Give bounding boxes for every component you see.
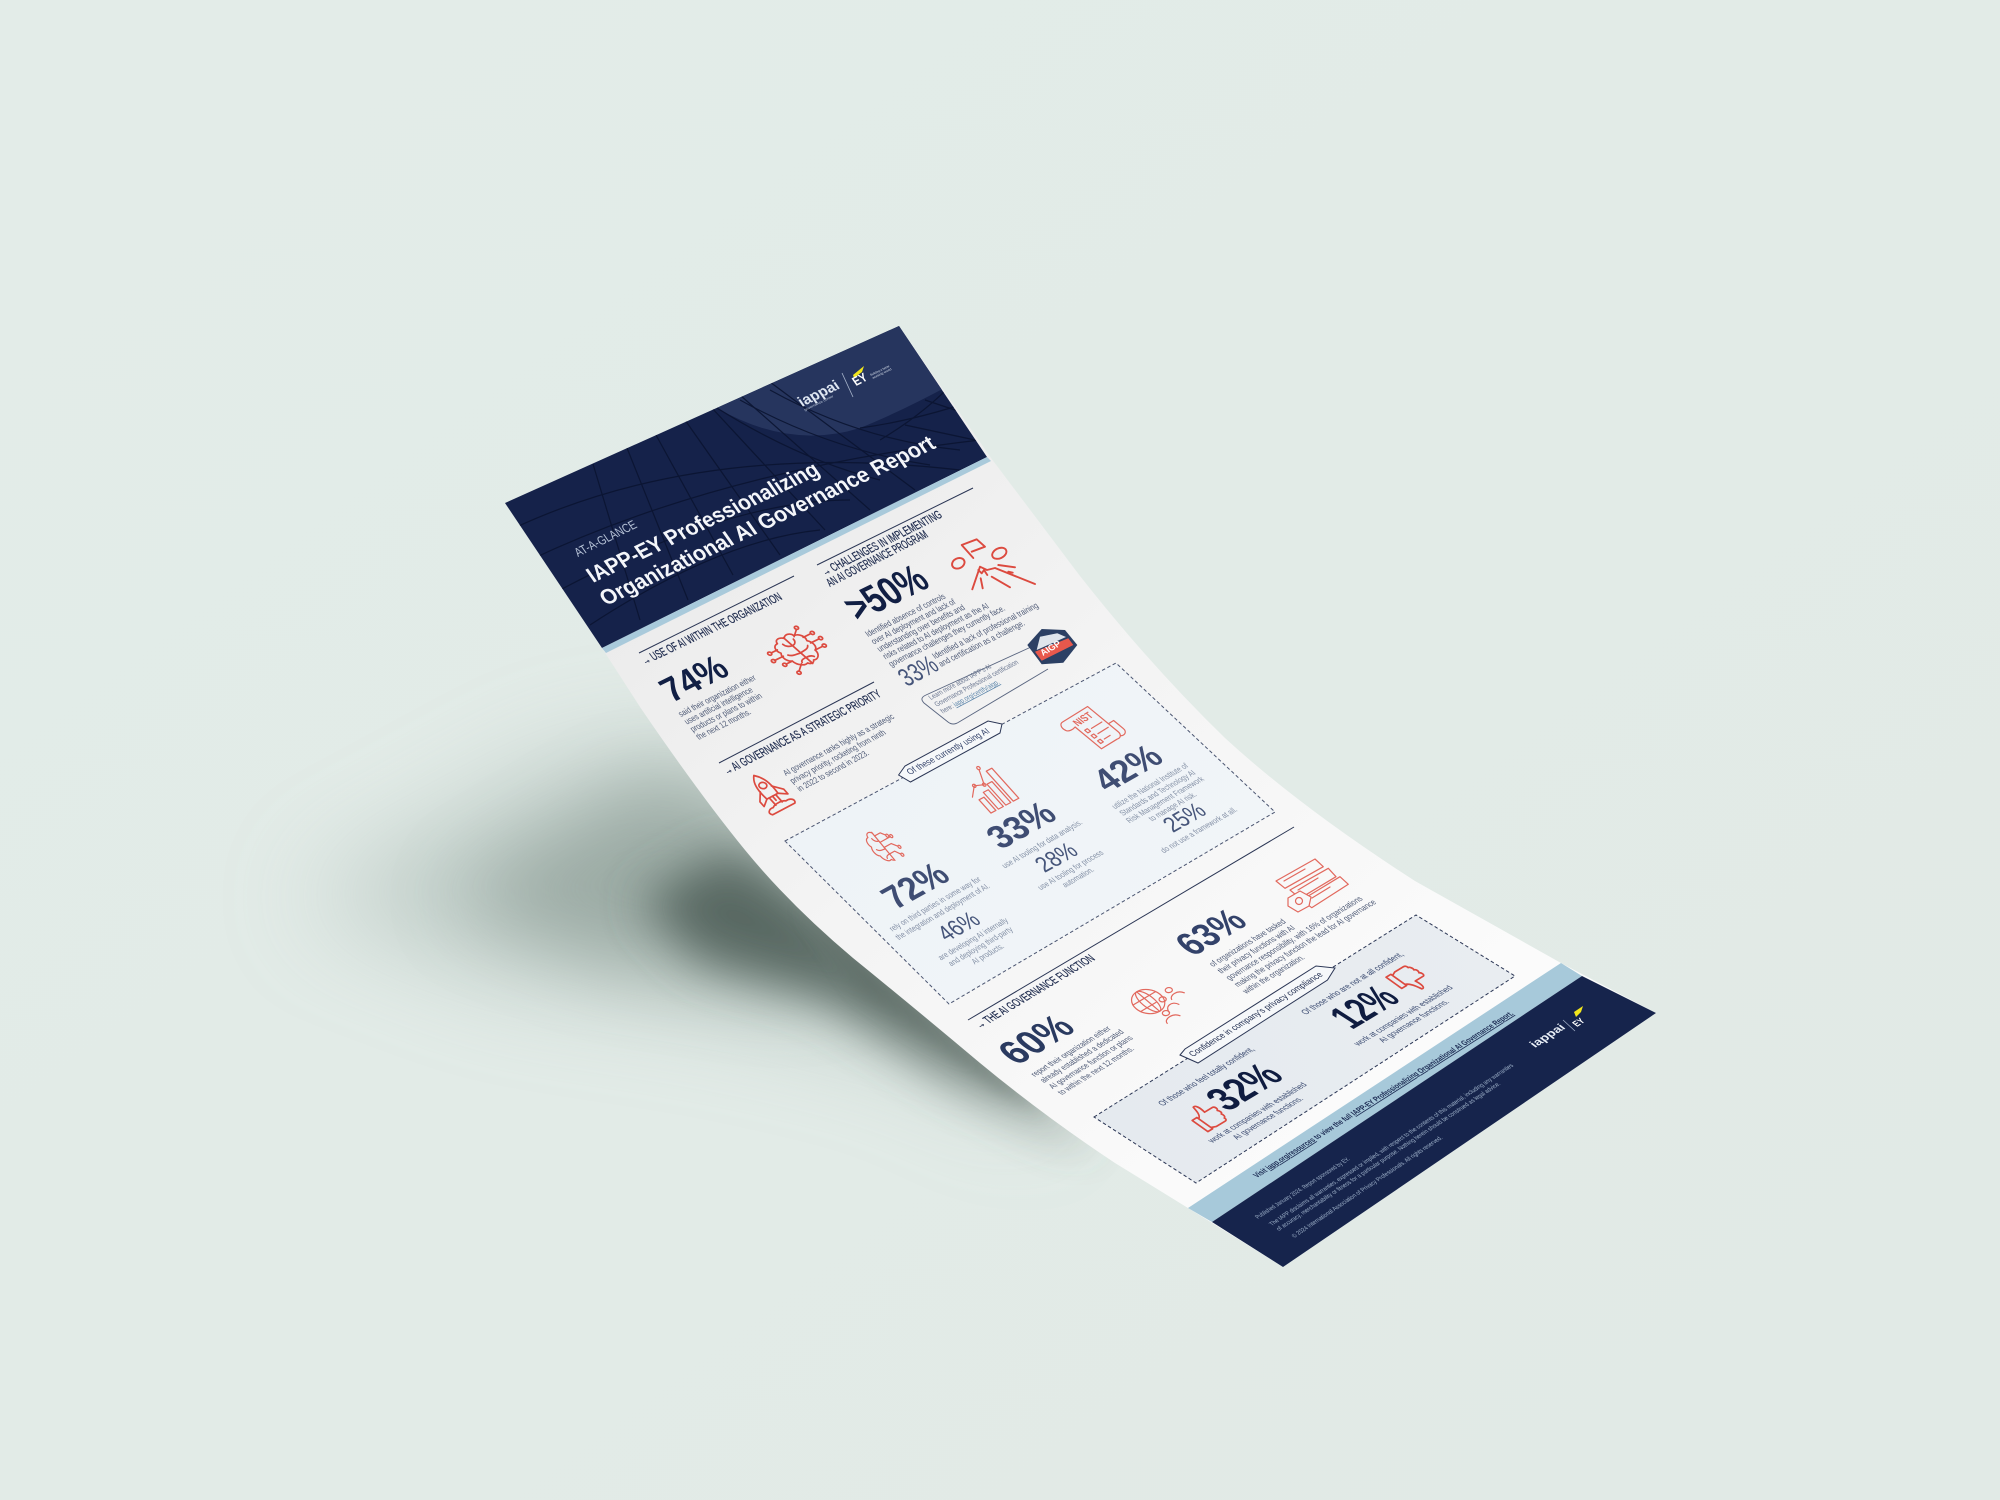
text: legal notes: of accuracy, merchantability or fitness for a particular purpose. Nothing herein should be construed as legal advice. [1275, 1081, 1503, 1232]
heading: challenges: → CHALLENGES IN IMPLEMENTING [818, 508, 945, 578]
text: >50% description: over AI deployment and lack of [869, 597, 958, 646]
header logo: iapp ai: iappai [795, 377, 843, 410]
label: of these currently using AI: Of these currently using AI [904, 727, 992, 777]
icon: globe and people [1125, 976, 1198, 1028]
text: >50% description: risks related to AI deployment as the AI [881, 601, 991, 661]
panel: confidence in privacy compliance [1094, 915, 1515, 1183]
text: no framework: do not use a framework at all. [1158, 805, 1240, 855]
footer logos: EY [1571, 1017, 1588, 1029]
heading: strategic priority: → AI GOVERNANCE AS A STRATEGIC PRIORITY [720, 687, 884, 777]
header banner [505, 300, 1000, 648]
callout: AIGP certification: Learn more about IAPP's AI [927, 663, 994, 702]
text: 63% description: making the privacy function the lead for AI governance [1232, 898, 1379, 989]
text: 63% description: within the organization. [1239, 953, 1307, 996]
heading: challenges: AN AI GOVERNANCE PROGRAM [823, 528, 931, 589]
text: 42% description: to manage AI risk. [1146, 790, 1199, 823]
text: 72% description: rely on third parties in some way for [887, 875, 983, 933]
stat: 63%: 63% [1167, 902, 1256, 963]
text: 60% description: already established a dedicated [1037, 1028, 1126, 1084]
icon: thumbs down [1386, 964, 1434, 995]
text: 60% description: AI governance function or plans [1046, 1034, 1135, 1090]
icon: AIGP badge: AIGP [1038, 639, 1063, 658]
text: 74% description: uses artificial intelligence [682, 685, 755, 726]
text: data analysis: use AI tooling for data analysis. [999, 818, 1085, 870]
stat: 46%: 46% [931, 907, 986, 946]
panel: AI governance as a strategic priority [719, 682, 910, 815]
text: 12% description: AI governance functions. [1375, 998, 1452, 1044]
footer panel [1212, 976, 1656, 1267]
header logo: EY: EY [849, 370, 871, 388]
text: >50% description: Identified absence of controls [863, 592, 948, 639]
mockup scene [324, 326, 1656, 1267]
stat: >50%: >50% [835, 556, 937, 629]
stat: 12%: 12% [1319, 979, 1410, 1035]
text: 63% description: of organizations have tasked [1207, 917, 1288, 968]
panel: use of AI [638, 576, 841, 742]
icon: mountain with flag [950, 539, 1035, 589]
header logo: EY: working world [871, 367, 893, 380]
text: 33% description: and certification as a challenge. [936, 619, 1027, 669]
text: legal notes: Published January 2024. Report sponsored by EY. [1254, 1157, 1352, 1220]
stat: 42%: 42% [1084, 738, 1171, 799]
heading: challenges [818, 508, 945, 589]
callout: AIGP certification: here: [939, 703, 957, 715]
footer logos: iappai [1526, 1021, 1568, 1050]
text: 42% description: Risk Management Framework [1124, 775, 1207, 825]
text: 32% description: AI governance functions. [1229, 1095, 1306, 1141]
title: IAPP-EY Professionalizing [582, 457, 824, 587]
panel: of those currently using AI [785, 663, 1275, 1004]
text: 63% description: their privacy functions with AI [1215, 924, 1298, 975]
text: strategic priority description: privacy priority, rocketing from ninth [788, 728, 888, 786]
icon: rocket [742, 769, 796, 815]
stat: 33%: 33% [892, 650, 944, 692]
text: 46% description: AI products. [969, 942, 1006, 966]
text: legal notes: © 2024 International Association of Privacy Professionals. All rights reserved. [1290, 1134, 1445, 1239]
text: >50% description: governance challenges they currently face. [887, 604, 1007, 669]
stat: 72%: 72% [873, 856, 958, 916]
text: 46% description: and deploying third-party [946, 925, 1015, 968]
panel: the AI governance function [968, 827, 1387, 1096]
header logo: EY: Building a better [869, 364, 891, 377]
stat: 60%: 60% [988, 1007, 1084, 1071]
stat: 74%: 74% [652, 648, 736, 709]
text: 32% description: work at companies with established [1204, 1081, 1310, 1144]
paper shadow [300, 740, 1100, 1150]
text: strategic priority description: AI governance ranks highly as a strategic [781, 712, 896, 778]
heading: AI governance function: → THE AI GOVERNANCE FUNCTION [972, 952, 1098, 1031]
heading: use of AI: → USE OF AI WITHIN THE ORGANIZATION [638, 590, 785, 667]
stat: 28%: 28% [1029, 838, 1084, 877]
header logo: iapp ai: governance center [803, 394, 835, 412]
text: totally confident: Of those who feel totally confident, [1155, 1045, 1257, 1107]
header logo divider [842, 373, 853, 397]
text: process automation: use AI tooling for process [1035, 848, 1106, 892]
stat: 33%: 33% [978, 795, 1064, 856]
paper sheet [505, 326, 1656, 1267]
footer call to action band: Visit iapp.org/resources to view the full IAPP-EY Professionalizing Organizational AI Governance Report. [1251, 1009, 1516, 1179]
text: 63% description: governance responsibility, with 16% of organizations [1224, 894, 1365, 982]
text: legal notes: The IAPP disclaims all warranties, expressed or implied, with respect to the contents of this material, including any warranties [1268, 1063, 1516, 1227]
eyebrow: at-a-glance: AT-A-GLANCE [571, 517, 640, 559]
icon: NIST scroll: NIST [1071, 711, 1097, 729]
title: Organizational AI Governance Report [595, 431, 940, 610]
text: >50% description: understanding over benefits and [875, 603, 967, 654]
label: confidence in privacy compliance: Confidence in company's privacy compliance [1187, 971, 1326, 1059]
icon: thumbs up [1182, 1100, 1230, 1132]
text: 60% description: to within the next 12 months. [1055, 1045, 1137, 1096]
stat: 25%: 25% [1157, 798, 1212, 837]
text: 42% description: Standards and Technology AI [1117, 768, 1198, 817]
text: 60% description: report their organization either [1028, 1025, 1114, 1078]
icon: brain circuit [861, 824, 908, 866]
footer call to action band [1188, 963, 1582, 1222]
text: 74% description: the next 12 months. [694, 707, 753, 742]
header logo: EY [849, 364, 893, 388]
panel: challenges [817, 488, 1077, 724]
icon: settings and badge [1276, 859, 1348, 912]
icon: NIST scroll [1058, 703, 1128, 754]
text: strategic priority description: in 2022 to second in 2023. [795, 748, 871, 793]
text: 46% description: are developing AI internally [936, 916, 1011, 962]
stat: 32%: 32% [1195, 1056, 1294, 1117]
text: process automation: automation. [1060, 865, 1096, 889]
text: 12% description: work at companies with established [1350, 984, 1456, 1047]
text: not at all confident: Of those who are not at all confident, [1298, 950, 1406, 1016]
icon: AIGP badge [1027, 629, 1077, 664]
callout: AIGP certification [922, 647, 1048, 724]
text: 74% description: products or plans to within [688, 691, 764, 734]
text: 74% description: said their organization either [676, 673, 758, 719]
callout: AIGP certification: iapp.org/certify/aigp. [952, 679, 1002, 708]
text: 42% description: utilize the National Institute of [1109, 761, 1191, 811]
callout: AIGP certification: Governance Professional certification [933, 659, 1021, 708]
icon: bar chart [956, 762, 1019, 815]
header accent strip [602, 457, 991, 653]
text: 72% description: the integration and deployment of AI. [893, 882, 992, 942]
text: 33% description: Identified a lack of professional training [930, 601, 1040, 661]
text: legal notes [1254, 1063, 1516, 1239]
icon: brain [754, 622, 841, 679]
footer logos [1526, 1006, 1588, 1050]
